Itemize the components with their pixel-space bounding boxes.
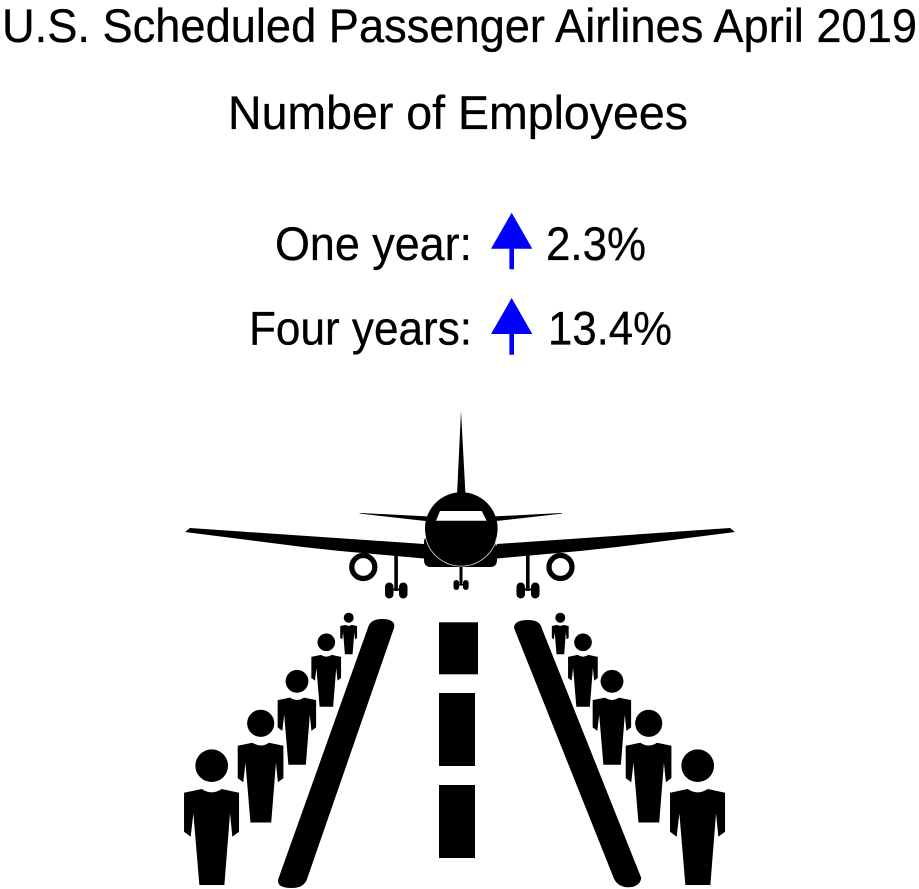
left engine: [352, 556, 375, 578]
four year stat: [249, 298, 672, 355]
person: [278, 670, 316, 765]
fuselage highlight arc: [426, 537, 497, 566]
person: [626, 710, 671, 822]
person: [340, 613, 357, 654]
icon: blue up arrow four years: [491, 298, 532, 355]
person: [311, 633, 341, 707]
left runway edge: [278, 619, 394, 888]
one year label: One year:: [275, 217, 472, 270]
cockpit window: [436, 511, 487, 521]
fuselage: [425, 492, 498, 565]
person: [593, 670, 631, 765]
left line of employees: [184, 613, 357, 885]
icon: blue up arrow one year: [491, 213, 532, 269]
nose landing gear: [454, 565, 469, 590]
person: [238, 710, 283, 822]
tail fin: [457, 411, 466, 495]
icon: airplane front view: [185, 411, 735, 598]
person: [568, 633, 598, 707]
left landing gear: [385, 555, 408, 598]
subtitle: Number of Employees: [228, 86, 688, 139]
runway centre dash 2: [439, 693, 475, 766]
person: [552, 613, 569, 654]
runway: [278, 619, 641, 888]
person: [670, 749, 725, 885]
right engine: [549, 556, 572, 578]
runway centre dash 1: [439, 622, 478, 674]
right runway edge: [514, 620, 641, 887]
right line of employees: [552, 613, 725, 885]
right tailplane: [492, 513, 563, 522]
one year stat: [275, 213, 646, 270]
four years value: 13.4%: [548, 302, 672, 354]
right landing gear: [516, 555, 540, 598]
left wing: [185, 528, 430, 559]
lower fuselage: [424, 537, 497, 567]
one year value: 2.3%: [546, 217, 646, 270]
runway centre dash 3: [439, 785, 475, 858]
four years label: Four years:: [249, 302, 472, 354]
person: [184, 749, 239, 885]
right wing: [490, 528, 735, 559]
left tailplane: [359, 513, 430, 522]
